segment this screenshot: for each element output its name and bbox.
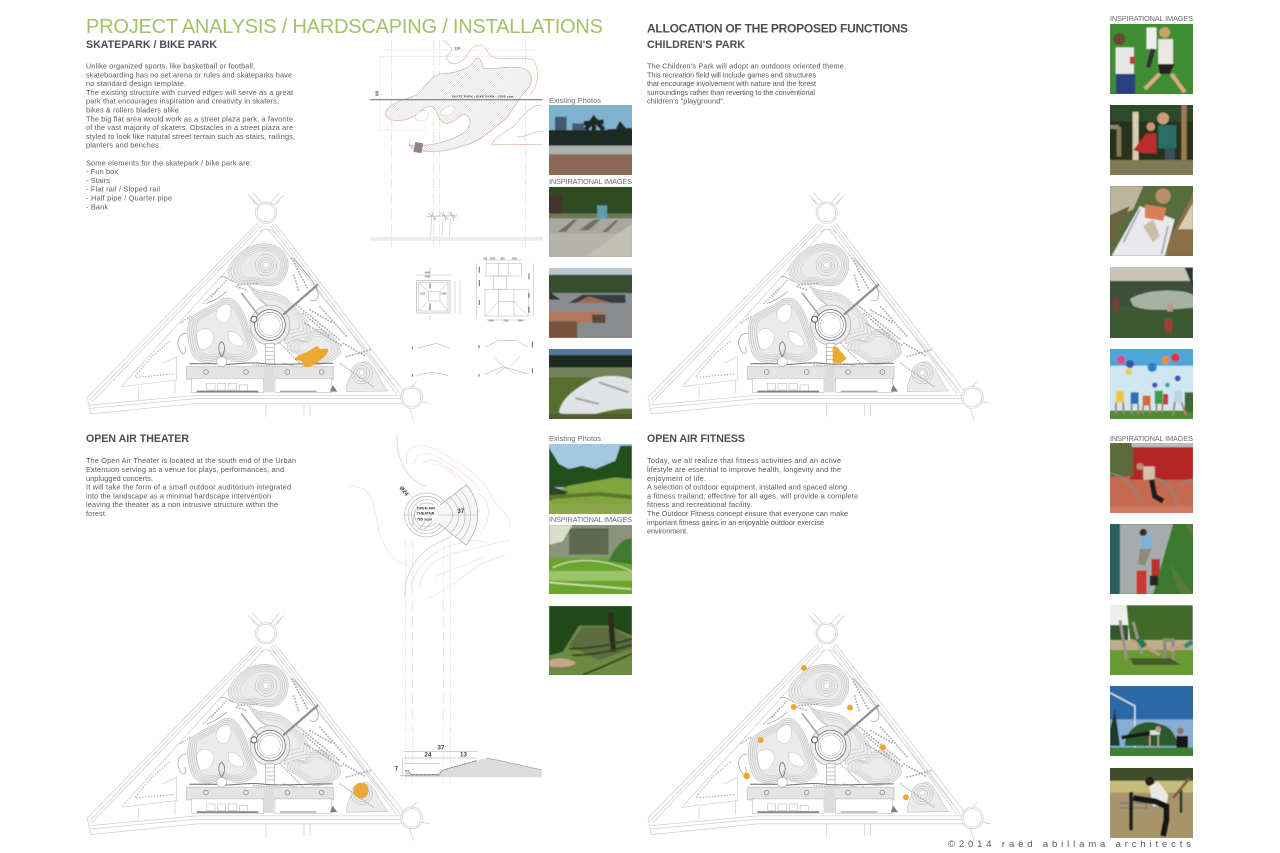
heading: skatepark: SKATEPARK / BIKE PARK xyxy=(86,39,217,51)
fun box plans and elevations: 2000 xyxy=(441,294,447,296)
photo: white skate bowl xyxy=(549,349,632,419)
label: inspirational images: INSPIRATIONAL IMAGES xyxy=(1110,14,1193,23)
master plan: fitness stations highlighted xyxy=(648,613,991,841)
text block: skatepark description: Some elements for the skatepark / bike park are: xyxy=(86,158,252,167)
theater plan and section drawing xyxy=(350,435,542,783)
text block: children's park description: children's "playground". xyxy=(647,97,725,106)
fun box plans and elevations: 2000 xyxy=(490,258,496,260)
panel: children's park xyxy=(647,14,1196,422)
heading: open air theater: OPEN AIR THEATER xyxy=(86,433,189,445)
text block: fitness description: enjoyment of life. xyxy=(647,474,706,483)
theater plan and section drawing: 37 xyxy=(457,508,465,515)
text block: skatepark description: park that encourages inspiration and creativity in skaters, xyxy=(86,97,279,106)
photo: outdoor bench push-ups xyxy=(1110,605,1193,675)
text block: fitness description: Today, we all realize that fitness activities and an active xyxy=(647,456,841,465)
text block: skatepark description: The big flat area would work as a street plaza park, a favorite xyxy=(86,114,293,123)
photo: skate plaza with box xyxy=(549,268,632,338)
skatepark plan drawing xyxy=(370,40,543,247)
text block: fitness description: environment. xyxy=(647,527,688,536)
text block: theater description: Extension serving as a venue for plays, performances, and xyxy=(86,465,284,474)
panel: open air theater xyxy=(86,433,635,841)
label: existing photos: Existing Photos xyxy=(549,434,601,443)
text block: skatepark description: - Flat rail / Sloped rail xyxy=(86,185,160,194)
photo: climbing wall xyxy=(1110,524,1193,594)
fun box plans and elevations: 2000 xyxy=(489,321,495,323)
text block: skatepark description: styled to look like natural street terrain such as stairs, railings, xyxy=(86,132,295,141)
skatepark plan drawing: SKATE PARK / BIKE PARK - 2300 sqm xyxy=(452,94,514,98)
text block: skatepark description: - Fun box xyxy=(86,167,118,176)
text block: skatepark description: The existing structure with curved edges will serve as a great xyxy=(86,88,293,97)
heading: children's park: CHILDREN'S PARK xyxy=(647,39,745,51)
theater plan and section drawing: OPEN AIR xyxy=(417,506,435,510)
photo: stretching on outdoor equipment xyxy=(1110,768,1193,838)
fun box plans and elevations xyxy=(412,258,533,377)
photo: plank with trainer, blue sky xyxy=(1110,686,1193,756)
panel: open air fitness xyxy=(647,433,1196,841)
label: inspirational images: INSPIRATIONAL IMAGES xyxy=(1110,434,1193,443)
master plan: children's park highlighted xyxy=(648,193,991,420)
text block: children's park description: that encourage involvement with nature and the forest xyxy=(647,79,816,88)
photo: concrete skate ramps xyxy=(549,187,632,257)
photo: grass amphitheater xyxy=(549,525,632,594)
text block: theater description: unplugged concerts. xyxy=(86,474,153,483)
text block: fitness description: lifestyle are essential to improve health, longevity and the xyxy=(647,465,841,474)
panel: skatepark xyxy=(86,39,635,422)
text block: children's park description xyxy=(647,62,846,106)
skatepark plan drawing: 80 xyxy=(375,90,380,96)
theater plan and section drawing: 765 sqm xyxy=(417,518,433,522)
theater plan and section drawing: 24 xyxy=(424,751,432,758)
label: inspirational images: INSPIRATIONAL IMAGES xyxy=(549,515,632,524)
text block: fitness description: The Outdoor Fitness concept ensure that everyone can make xyxy=(647,509,848,518)
label: existing photos: Existing Photos xyxy=(549,96,601,105)
theater plan and section drawing: 7 xyxy=(395,765,399,772)
text block: fitness description: important fitness gains in an enjoyable outdoor exercise xyxy=(647,518,824,527)
photo: giant bubbles on grass xyxy=(1110,267,1193,338)
text block: skatepark description: Unlike organized sports, like basketball or football, xyxy=(86,62,255,70)
fun box plans and elevations: 1500 xyxy=(503,321,509,323)
photo: children with balloons xyxy=(1110,349,1193,419)
photo: existing grassy slope xyxy=(549,444,632,514)
text block: theater description: into the landscape as a minimal hardscape intervention xyxy=(86,491,271,500)
text block: fitness description xyxy=(647,456,858,536)
fun box plans and elevations: 800 xyxy=(501,258,505,260)
text block: skatepark description: bikes & rollers bladers alike. xyxy=(86,106,181,114)
fun box plans and elevations: 2100 xyxy=(420,294,426,296)
text block: children's park description: surroundings rather than reverting to the conventional xyxy=(647,88,815,97)
theater plan and section drawing: 13 xyxy=(460,751,468,758)
fun box plans and elevations: 2000 xyxy=(512,258,518,260)
fun box plans and elevations: 4400 xyxy=(425,271,431,274)
text block: theater description: The Open Air Theater is located at the south end of the Urban xyxy=(86,456,296,465)
text block: skatepark description: - Half pipe / Quarter pipe xyxy=(86,194,172,202)
footer credit: ©2014 raëd abillama architects xyxy=(948,839,1191,850)
heading: open air fitness: OPEN AIR FITNESS xyxy=(647,433,745,445)
text block: theater description: It will take the form of a small outdoor auditorium integrated xyxy=(86,483,291,492)
theater plan and section drawing: THEATER xyxy=(417,512,435,516)
text block: skatepark description: planters and benches. xyxy=(86,141,161,150)
heading: allocation of the proposed functions: ALLOCATION OF THE PROPOSED FUNCTIONS xyxy=(647,22,908,36)
master plan: skatepark highlighted xyxy=(87,193,430,420)
fun box plans and elevations: 3000 xyxy=(425,276,431,278)
text block: theater description: leaving the theater as a non intrusive structure within the xyxy=(86,500,278,509)
fun box plans and elevations: 2000 xyxy=(518,321,524,323)
title: PROJECT ANALYSIS / HARDSCAPING / INSTALLATIONS xyxy=(86,16,603,38)
text block: skatepark description: of the vast majority of skaters. Obstacles in a street plaza are xyxy=(86,123,293,132)
fitness station markers xyxy=(743,665,909,800)
fun box plans and elevations: 200 xyxy=(483,258,488,260)
text block: children's park description: This recreation field will include games and structures xyxy=(647,70,816,79)
text block: skatepark description: no standard design template. xyxy=(86,79,186,88)
text block: skatepark description: - Stairs xyxy=(86,176,110,185)
photo: children on rope net xyxy=(1110,105,1193,175)
text block: theater description: forest. xyxy=(86,509,107,518)
photo: running children xyxy=(1110,24,1193,94)
text block: fitness description: A selection of outdoor equipment, installed and spaced along xyxy=(647,483,847,492)
label: inspirational images: INSPIRATIONAL IMAGES xyxy=(549,177,632,186)
text block: fitness description: fitness and recreational facility. xyxy=(647,500,752,509)
photo: stepped green amphitheater xyxy=(549,606,632,675)
photo: red wall parkour xyxy=(1110,443,1193,513)
text block: fitness description: a fitness trailand, effective for all ages, will provide a complete xyxy=(647,491,858,500)
photo: existing skatepark site xyxy=(549,105,632,175)
text block: theater description xyxy=(86,456,296,518)
master plan: theater highlighted xyxy=(87,613,430,841)
skatepark plan drawing: 110 xyxy=(454,46,460,50)
theater plan and section drawing: Ø24 xyxy=(398,485,410,498)
theater plan and section drawing: 37 xyxy=(437,744,445,751)
text block: skatepark description: - Bank xyxy=(86,202,108,211)
text block: skatepark description: skateboarding has no set arena or rules and skateparks have xyxy=(86,70,292,79)
text block: skatepark description xyxy=(86,62,295,211)
text block: children's park description: The Children's Park will adopt an outdoors oriented theme. xyxy=(647,62,846,70)
photo: child on slide xyxy=(1110,186,1193,256)
